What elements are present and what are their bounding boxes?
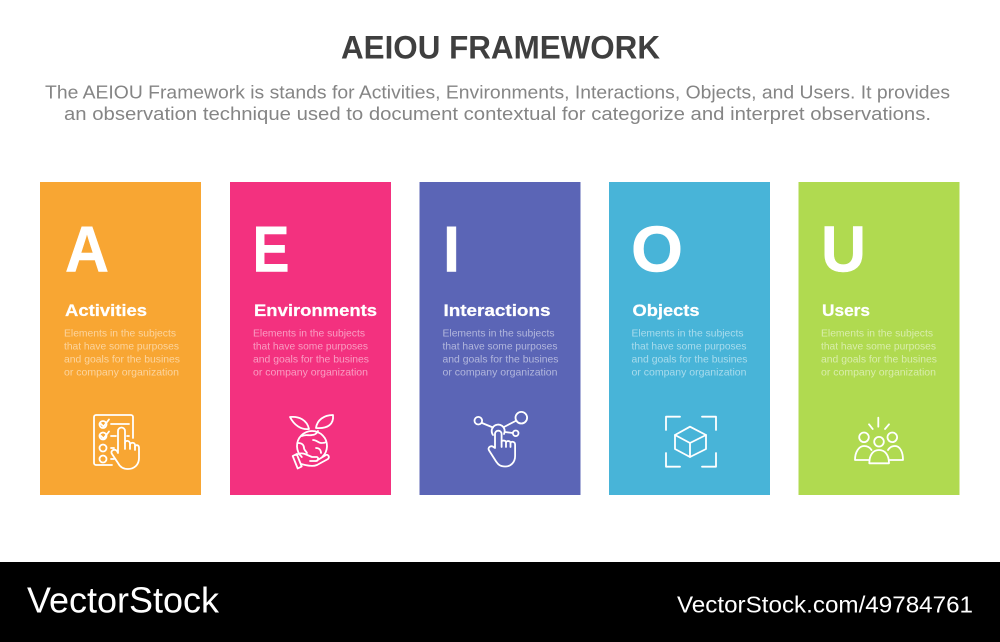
title: AEIOU FRAMEWORK [341, 30, 660, 66]
description: activities: and goals for the busines [64, 354, 180, 366]
description: environments: Elements in the subjects [253, 328, 365, 340]
description: objects: Elements in the subjects [632, 328, 744, 340]
description: objects [632, 328, 748, 378]
description: users [821, 328, 937, 378]
description: interactions [442, 328, 558, 378]
heading: interactions: Interactions [444, 301, 550, 320]
icon: touch network [474, 412, 527, 466]
panel: users [798, 182, 960, 495]
letter E: E [252, 212, 290, 286]
description: users: or company organization [821, 368, 936, 378]
panel: interactions [420, 182, 580, 495]
footer logo text: VectorStock [27, 580, 220, 620]
letter O: O [631, 212, 683, 286]
description: objects: that have some purposes [632, 342, 746, 352]
panel: activities [40, 182, 201, 495]
letter U: U [821, 212, 866, 286]
description: users: that have some purposes [821, 342, 936, 352]
letter I: I [443, 212, 460, 286]
description: users: and goals for the busines [821, 354, 937, 366]
icon: group of users [855, 418, 903, 463]
heading: environments: Environments [254, 301, 377, 320]
heading: objects: Objects [632, 301, 700, 320]
subtitle text [45, 82, 950, 124]
panel: objects [609, 182, 770, 495]
letter A: A [65, 212, 109, 286]
description: interactions: or company organization [442, 368, 558, 378]
description: interactions: Elements in the subjects [442, 328, 554, 340]
icon: checklist with pointing hand [94, 415, 139, 469]
heading: activities: Activities [65, 301, 147, 320]
description: activities: that have some purposes [64, 342, 179, 352]
footer image id: VectorStock.com/49784761 [677, 592, 973, 618]
description: activities: Elements in the subjects [64, 328, 176, 340]
description: objects: or company organization [632, 368, 747, 378]
description: activities [64, 328, 180, 378]
description: interactions: that have some purposes [442, 342, 558, 352]
description: environments [253, 328, 369, 378]
icon: cube in focus frame [666, 417, 716, 467]
footer band [0, 562, 1000, 642]
subtitle text: an observation technique used to document contextual for categorize and interpret observations. [64, 104, 931, 124]
subtitle text: The AEIOU Framework is stands for Activities, Environments, Interactions, Objects, and Users. It provides [45, 82, 950, 102]
description: interactions: and goals for the busines [442, 354, 558, 366]
heading: users: Users [822, 301, 870, 320]
description: environments: or company organization [253, 368, 368, 378]
description: objects: and goals for the busines [632, 354, 748, 366]
description: environments: and goals for the busines [253, 354, 369, 366]
description: environments: that have some purposes [253, 342, 368, 352]
description: users: Elements in the subjects [821, 328, 933, 340]
icon: globe with leaves in hand [290, 415, 333, 468]
description: activities: or company organization [64, 368, 179, 378]
panel: environments [230, 182, 391, 495]
